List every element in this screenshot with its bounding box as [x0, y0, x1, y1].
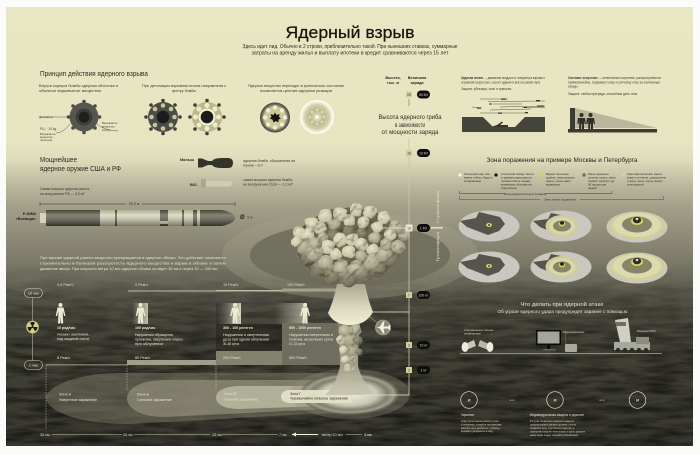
text: rocket description: стремительно и большая разогретость ядерного вещества и взрыв в облаке и затем — [40, 262, 227, 266]
label: rocket name: Р-36М2 — [23, 212, 36, 216]
icon: radiation — [26, 321, 39, 333]
label: rocket name — [16, 212, 36, 221]
scale header: тыс. м — [387, 81, 399, 85]
legend: получат ожоги, мало — [588, 176, 616, 180]
text: shock wave: Защита: убежища, окоп и траншея. — [461, 87, 512, 91]
icon: television — [536, 330, 561, 352]
legend: Сплошной пожар: бетон — [501, 172, 534, 176]
icon: sirens — [462, 328, 493, 352]
heading: weapons — [40, 156, 121, 173]
zone B — [127, 380, 368, 417]
diagram: bomb structure — [39, 100, 118, 142]
zone D: Чрезвычайно опасное заражение — [290, 396, 348, 400]
rates: 10 h: 15 Рем/ч — [223, 283, 238, 287]
text: action one — [461, 413, 502, 433]
icons: action circles: И — [554, 398, 557, 402]
text: rocket caption: Самая мощная ядерная ракета, — [40, 187, 90, 191]
bars: 10 h dose — [128, 288, 336, 292]
legend — [458, 172, 666, 190]
captions: principle steps: При детонации взрывная волна направлена к — [142, 84, 226, 88]
zone captions — [59, 392, 258, 402]
legend: Световая вспышка: ожоги — [627, 172, 662, 176]
label: rocket name: «Воевода» — [16, 217, 36, 221]
legend: ожоги, очень мало — [546, 179, 571, 183]
text: dose effects: Нарушения обращения — [135, 333, 173, 337]
diagram: bomb structure: вещество — [40, 135, 53, 139]
scale header — [385, 76, 427, 85]
rocket — [40, 210, 235, 226]
brackets: radius: Зона лёгких поражений — [544, 198, 576, 202]
zone captions: Опасное заражение — [224, 398, 258, 402]
scale markers: 13 — [407, 226, 411, 230]
icon: aircraft — [368, 315, 390, 335]
text: action two: запас воды и еды, слушайте объявления — [530, 433, 578, 437]
legend: смертельно — [501, 186, 517, 190]
map: Petersburg small — [458, 252, 520, 282]
label: 10 hours pill: 10 час — [28, 292, 39, 296]
text: rocket description: При взрыве ядерной ракеты вещество превращается в ядерное облако. Это действие начинается — [40, 256, 226, 260]
captions: principle steps: Ядерное вещество переходит в критическое состояние — [248, 84, 344, 88]
cloud cap — [291, 204, 410, 287]
charge pills: 10 Мт — [419, 152, 428, 156]
text: action one: и телевизор, следуйте инструкциям, — [461, 422, 502, 426]
mushroom cloud — [281, 204, 410, 419]
legend: Лишь немногие — [588, 172, 609, 176]
icon: radio — [563, 330, 585, 352]
text: dose effects: 300 - 100 рентген — [223, 326, 253, 330]
text: action one: возьмите документы и воду — [461, 429, 493, 433]
legend: конструкций — [627, 182, 644, 186]
illustration: shadow — [568, 108, 657, 132]
label: 1 hour pill: 1 час — [29, 364, 38, 368]
text: dose effects: 30–60 суток — [223, 342, 239, 346]
distance axis: 26 км — [123, 433, 133, 437]
dashed guides — [46, 365, 216, 430]
legend: Огненный шар: всё — [464, 172, 490, 176]
bomb: B61: самая мощная ядерная бомба, — [243, 178, 293, 182]
map: Petersburg large — [606, 252, 668, 284]
block: lethal dose panel — [46, 323, 340, 365]
icon: rocket diameter: 3 м — [247, 216, 253, 220]
bomb: B61 — [190, 178, 294, 188]
cloud base ring — [290, 369, 410, 419]
distance axis: 15 км — [212, 433, 222, 437]
map: Petersburg medium — [530, 252, 592, 282]
text: action two: помещении закройте вентиляцию и щели, держите — [530, 430, 585, 434]
heading: principle: Принцип действия ядерного взрыва — [40, 70, 148, 78]
zones of contamination — [46, 365, 372, 430]
text: dose effects: 100 рад/час — [135, 326, 156, 330]
legend: выжившие облучаются — [501, 182, 532, 186]
scale markers: 3 — [408, 344, 410, 348]
zone captions: Зона А — [59, 392, 72, 396]
stem — [325, 322, 375, 395]
rates: 1 h — [57, 356, 307, 360]
captions: principle steps: начинается цепная ядерная реакция — [260, 89, 332, 93]
bomb: B61: B61 — [190, 183, 197, 187]
zone captions: Зона Б — [137, 392, 150, 396]
text: shock wave: огромной скоростью, сносит здания и всё на своём пути. — [461, 80, 541, 84]
zone captions: Сильное заражение — [137, 398, 172, 402]
map: Moscow large — [606, 212, 668, 242]
icon: sirens: Специальные сирены — [464, 328, 493, 332]
scale header: Величина — [408, 76, 427, 80]
charge pills: 10 кт — [420, 344, 428, 348]
icon: radio: Радиоприёмник — [563, 330, 585, 334]
bomb: Малыш: Хиросиму — 16 кТ — [243, 164, 264, 168]
rates: 10 h — [57, 283, 305, 287]
rates: 1 h: 200 Рем/ч — [223, 356, 241, 360]
rates: 1 h: 500 Рем/ч — [289, 356, 307, 360]
charge pills: 50 Мт — [419, 93, 428, 97]
diagram: detonation start — [144, 99, 182, 135]
text: dose effects: 10 рад/час — [57, 326, 76, 330]
icons: action circles: или — [599, 398, 605, 402]
charge pills: 1 Мт — [420, 226, 428, 230]
heading: mushroom height: в зависимости — [395, 122, 425, 129]
icons: action circles: И — [636, 398, 639, 402]
icons: action circles — [461, 392, 646, 408]
heading: mushroom height: Высота ядерного гриба — [378, 113, 442, 121]
text: dose effects: доза при одном облучении — [223, 338, 269, 342]
panel: most powerful weapons — [16, 156, 295, 271]
text: action one: закройте окна, двигайтесь к убежищу, — [461, 426, 500, 430]
text: light radiation — [568, 76, 661, 96]
distance axis — [40, 432, 372, 437]
icons: human figures — [56, 303, 310, 324]
brackets: radius — [460, 191, 664, 202]
scale header: Высота, — [385, 76, 401, 80]
legend: людей, погибнут до — [588, 179, 615, 183]
gradient blocks behind humans — [132, 303, 307, 351]
heading: what to do: Что делать при ядерной атаке — [520, 301, 604, 308]
dimension: rocket length: 35,5 м — [129, 202, 140, 206]
legend: людей — [588, 186, 597, 190]
icon: launcher truck: Машины МЧС — [637, 329, 656, 333]
text: action one: Сразу после сирены включите радио — [461, 419, 499, 423]
terrain texture — [6, 265, 693, 446]
legend: кожи и сетчатки, разрушение — [627, 176, 666, 180]
legend: Взрыв: бетонные — [546, 172, 569, 176]
text: rocket caption — [40, 187, 90, 196]
icons: action circles: И — [468, 398, 471, 402]
distance axis: 7 км — [279, 433, 287, 437]
text: light radiation: Световое излучение — интенсивное излучение, распространяется — [568, 76, 661, 80]
scale markers — [406, 92, 412, 373]
zone A — [46, 373, 372, 424]
zone D — [281, 390, 352, 403]
zone D: Зона Г — [290, 392, 301, 396]
captions: principle steps: обычное взрывчатое вещество — [39, 89, 101, 93]
grey ellipse: cloud halo — [222, 211, 478, 299]
zone captions: Умеренное заражение — [59, 398, 97, 402]
icon: sirens: оповещения — [464, 332, 481, 336]
text: rocket description: движение вверх. При скорости ветра 10 м/с ядерное облако пройдет 36 км и через 10 — 100 км. — [40, 267, 218, 271]
text: dose effects: под защитой почти — [57, 337, 89, 341]
diagram: bomb structure: Детонатор — [39, 115, 53, 119]
panel: damage zones — [458, 156, 668, 284]
icon: television: телевизор — [543, 348, 556, 352]
heading: mushroom height — [378, 113, 442, 136]
diagram: bomb structure: оболочка — [40, 138, 53, 142]
text: dose effects: течение нескольких суток — [289, 338, 333, 342]
scale markers: 2 — [408, 368, 410, 372]
heading: what to do: Об угрозе ядерного удара предупредят заранее с помощью: — [498, 309, 628, 314]
legend: живое гибнет, будучи — [464, 176, 493, 180]
icon: rocket diameter — [240, 215, 253, 221]
panel: what to do — [460, 301, 662, 437]
text: dose effects: 10–15 суток — [289, 342, 305, 346]
text: dose effects: организма, смертельно опасно — [135, 338, 183, 342]
maps row 2 — [458, 252, 668, 284]
captions: principle steps — [39, 84, 344, 93]
legend: выживших — [546, 182, 561, 186]
text: rocket description — [40, 256, 227, 271]
diagram: bomb structure: корпус — [102, 128, 111, 132]
label: 1 hour pill — [24, 360, 42, 370]
illustration: shock wave — [462, 98, 545, 132]
charge pills: 1 кт — [421, 368, 427, 372]
maps row 1 — [458, 210, 668, 242]
scale markers: 25 — [407, 93, 411, 97]
text: action one: Укрытие — [461, 413, 474, 417]
text: dose effects: Нарушения смертельны в — [289, 333, 333, 337]
text: action two: средства защиты органов дыхания, плотно — [530, 422, 576, 426]
diagram: bomb structure: Взрывчатое — [40, 132, 56, 136]
rates: 1 h: 80 Рем/ч — [135, 356, 150, 360]
title: Ядерный взрыв — [286, 23, 414, 42]
text: shock wave: Ударная волна — движение воздуха от эпицентра взрыва с — [461, 76, 545, 80]
zone captions: Зона В — [224, 392, 237, 396]
intro text: Здесь идет лид. Обычно в 2 строки, приблизительно такой. При нынешних ставках, суммарные — [242, 43, 458, 50]
text: dose effects: 500 - 1000 рентген — [289, 326, 321, 330]
icon: launcher truck — [614, 318, 656, 352]
intro text: затраты на аренду жилья и выплату ипотеки в кредит сравниваются через 15 лет — [252, 50, 449, 56]
legend: здания, смертельные — [546, 176, 575, 180]
text: light radiation: Защита: любая преграда, способная дать тень. — [568, 92, 638, 96]
captions: principle steps: Внутри корпуса бомбы ядерная оболочка и — [39, 84, 118, 88]
charge pills — [417, 90, 430, 374]
map: Moscow small — [458, 210, 520, 242]
atmosphere labels — [435, 190, 440, 262]
panel: principle of explosion — [39, 70, 344, 142]
diagram: chain reaction — [300, 100, 334, 134]
diagram: compression — [188, 99, 226, 135]
heading: mushroom height: от мощности заряда — [382, 129, 439, 136]
bomb: Малыш — [180, 158, 295, 168]
text: shock wave — [461, 76, 545, 91]
icon: rocket diameter: Ø — [240, 215, 245, 221]
text: dose effects: при облучении — [135, 342, 163, 346]
chart: radiation levels — [24, 283, 340, 370]
legend: испарённым — [464, 179, 481, 183]
heading: what to do — [498, 301, 628, 314]
height scale — [361, 76, 443, 395]
legend: стекол, окон, порча легких — [627, 179, 663, 183]
scale header: заряда — [411, 81, 424, 85]
panel: shock wave — [461, 76, 661, 132]
text: dose effects: Никаких симптомов, — [57, 332, 89, 336]
legend: и здания разрушаются, — [501, 176, 532, 180]
zone C — [216, 386, 362, 409]
diagram: bomb structure: PU₂ · 10 kg — [40, 127, 57, 131]
brackets: radius: Зона разрушительных пожаров — [504, 192, 547, 196]
charge pills: 100 кт — [419, 294, 429, 298]
rates: 10 h: 100 Рем/ч — [287, 283, 305, 287]
rates: 10 h: 5 Рем/ч — [135, 283, 148, 287]
legend: полная гибель людей, — [501, 179, 531, 183]
bomb: B61: на вооружении США — 1,2 мТ — [243, 182, 294, 186]
text: rocket caption: на вооружении РФ — 5,5 мТ — [40, 192, 86, 196]
text: action two: Индивидуальная защита и укрытие — [530, 413, 584, 417]
bomb: Малыш: Малыш — [180, 158, 194, 162]
bell skirt — [328, 284, 373, 325]
scale markers: 19 — [407, 152, 411, 156]
text: action two: прикройте кожу, спуститесь в укрытие, в — [530, 426, 574, 430]
icons: action circles: или — [509, 398, 515, 402]
scale markers: 7 — [408, 294, 410, 298]
intro text — [242, 43, 458, 56]
label: 10 hours pill — [24, 288, 42, 298]
atmosphere labels: Тропосфера — [435, 231, 440, 262]
heading: weapons: ядерное оружие США и РФ — [40, 166, 121, 173]
text: light radiation: секунды. — [568, 84, 578, 88]
map: Moscow medium — [530, 210, 592, 242]
distance axis: ветер 10 м/с — [322, 433, 343, 437]
text: action two — [530, 413, 585, 437]
atmosphere labels: Стратосфера — [435, 190, 440, 223]
heading: damage zones: Зона поражения на примере Москвы и Петербурга — [486, 156, 638, 164]
rates: 10 h: 0,5 Рем/ч — [57, 283, 73, 287]
legend: 90 процентов — [588, 182, 607, 186]
text: light radiation: прямолинейно, поражает кожу и сетчатку глаз за считанные — [568, 80, 660, 84]
heading: weapons: Мощнейшее — [40, 156, 77, 164]
distance axis: 36 км — [40, 433, 50, 437]
text: action two: В случае объявления опасности наденьте — [530, 419, 574, 423]
diagram: critical state — [260, 102, 290, 132]
captions: principle steps: центру бомбы — [172, 89, 196, 93]
distance axis: 3 км — [364, 433, 372, 437]
diagram: bomb structure: Взрывчатое — [102, 121, 118, 125]
text: dose effects: Нарушения и смертельная — [223, 333, 269, 337]
diagram: bomb structure: вещество — [102, 124, 115, 128]
text: dose effects — [57, 326, 333, 346]
bomb: Малыш: ядерная бомба, сброшенная на — [243, 159, 295, 163]
rates: 1 h: 8 Рем/ч — [57, 356, 70, 360]
